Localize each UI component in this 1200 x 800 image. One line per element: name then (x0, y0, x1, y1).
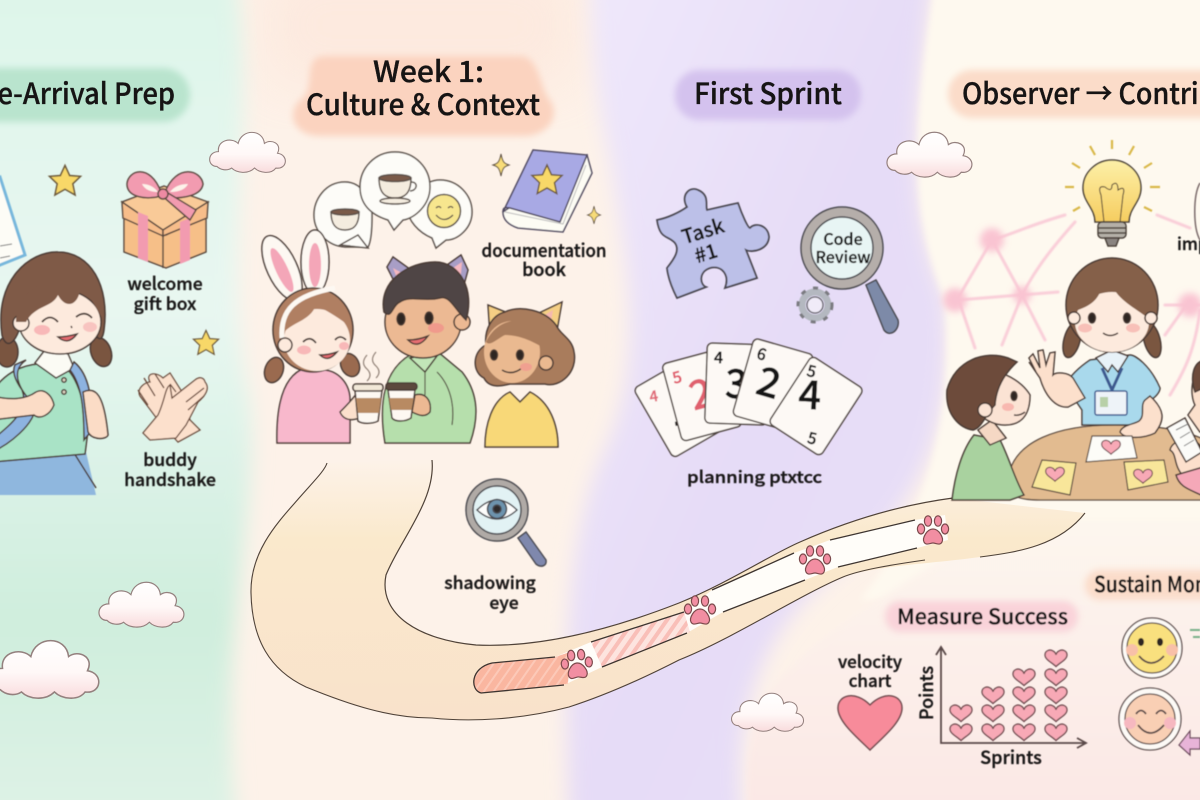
label: documentation book: book (522, 256, 567, 282)
card 2 (662, 348, 742, 442)
background panel: first sprint purple wash (567, 0, 947, 800)
icon: speech bubbles (314, 152, 472, 248)
journey path ribbon (251, 460, 1085, 720)
background panel: measure success pink wash (747, 520, 1200, 800)
label: welcome gift box: welcome (127, 271, 203, 296)
character: presenter with badge (1029, 258, 1164, 437)
card 2: 2 (682, 360, 719, 422)
card 5: 4 (797, 363, 823, 422)
heart column 1 (950, 705, 972, 740)
label: buddy handshake: handshake (124, 467, 216, 492)
icon: puzzle piece task 1: #1 (690, 235, 721, 269)
path progress hatch (474, 652, 570, 693)
card 4: 6 (754, 340, 770, 366)
icon: code review magnifier (801, 207, 898, 333)
card 5: 5 (805, 424, 820, 450)
icon: clipboard checklist (0, 177, 25, 275)
card 4 (732, 338, 814, 432)
character: boy in green seen from side (947, 355, 1030, 500)
path track white (481, 515, 948, 693)
character: girl with bunny ears (254, 230, 363, 443)
icon: big heart (838, 696, 902, 750)
icon: star small (194, 330, 218, 354)
paw prints (560, 516, 949, 679)
path progress hatch middle (591, 612, 690, 667)
axis label: sprints: Sprints (980, 744, 1042, 770)
chart: velocity hearts (913, 647, 1086, 770)
label: shadowing eye: shadowing (444, 570, 536, 595)
card 1: 4 (648, 385, 660, 407)
heading: first sprint (675, 70, 861, 120)
card 1 (633, 356, 731, 458)
card 1: 1 (664, 377, 697, 438)
icon: documentation book (503, 150, 592, 232)
network nodes (943, 228, 1200, 317)
heading: first sprint: First Sprint (694, 71, 842, 113)
card 3: 3 (724, 352, 749, 410)
icon: peach smiley (1119, 688, 1181, 750)
heading: week 1 culture and context: Week 1: (373, 49, 484, 91)
table (1008, 425, 1200, 500)
icon: code review magnifier: Review (815, 244, 871, 268)
icon: coffee cups in bubbles (331, 212, 359, 230)
arrow: cycle pink (1179, 731, 1200, 755)
character: girl with backpack (0, 252, 116, 495)
character: boy with cat ears (382, 255, 476, 443)
card 5 (763, 351, 864, 457)
card 3: 4 (714, 344, 724, 368)
character: curly haired girl with cat ears (475, 302, 575, 447)
clouds (0, 132, 972, 731)
icon: welcome gift box (122, 172, 208, 268)
knowledge network lines (958, 215, 1200, 395)
icon: puzzle piece task 1 (657, 189, 769, 298)
card 4: 2 (751, 349, 789, 411)
icon: code review magnifier: Code (823, 226, 863, 250)
card 5: 5 (805, 357, 819, 383)
background panel: pre-arrival green wash (0, 0, 252, 800)
icon: coffee cups (340, 352, 430, 423)
label: planning poker: planning ptxtcc (687, 464, 823, 488)
background panel: observer cream wash (860, 0, 1200, 600)
circle icon cropped at right (1195, 183, 1200, 240)
label: shadowing eye: eye (489, 590, 519, 615)
icon: lightbulb (1065, 140, 1160, 246)
heading: week 1 culture and context: Culture & Context (306, 82, 540, 124)
icon: gear (798, 288, 832, 322)
background panel: week 1 top peach tint (260, 0, 580, 90)
label: velocity chart: velocity (838, 648, 903, 673)
card 2: 5 (669, 363, 684, 389)
icon: puzzle piece task 1: Task (678, 210, 728, 250)
label: buddy handshake: buddy (143, 447, 197, 472)
icon: sparkles (493, 154, 600, 224)
heart column 2 (982, 687, 1004, 740)
icon: star (50, 166, 80, 195)
axis label: points: Points (913, 666, 939, 720)
heading: measure success: Measure Success (897, 601, 1068, 631)
cards on table with hearts (1032, 436, 1168, 495)
label: documentation book: documentation (482, 237, 606, 263)
heart column 3 (1013, 669, 1035, 740)
label: velocity chart: chart (849, 667, 892, 692)
heart column 4 (1045, 650, 1067, 740)
arrow: cycle green (1190, 630, 1200, 637)
heading: week 1 culture and context (293, 49, 554, 136)
planning cards (633, 338, 864, 458)
card 3 (705, 343, 769, 425)
icon: yellow smiley (1122, 618, 1182, 678)
icon: shadowing eye magnifier (466, 479, 546, 566)
icon: buddy handshake (138, 373, 207, 442)
character: person on right with note (1167, 360, 1200, 500)
label: welcome gift box: gift box (134, 291, 196, 316)
